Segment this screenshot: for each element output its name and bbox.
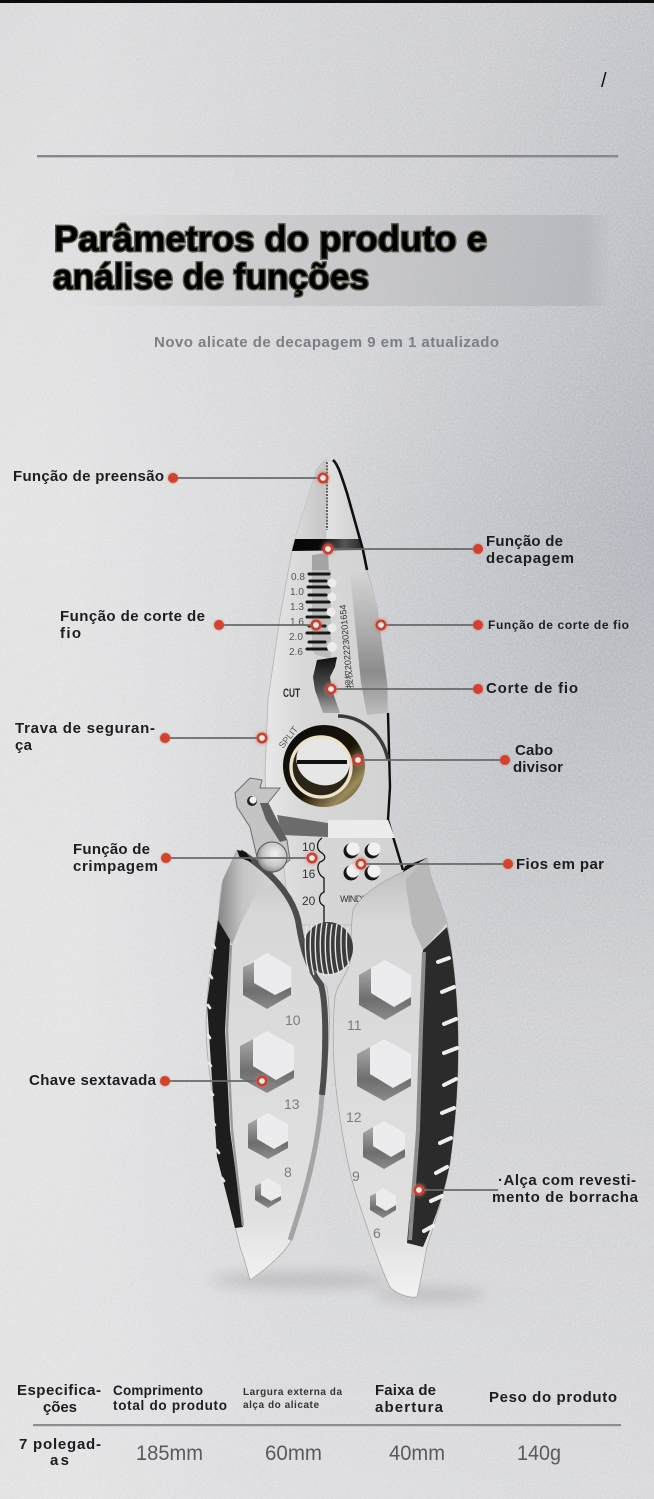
callout: safety lock: ça (15, 737, 33, 754)
spec header: handle width: alça do alicate (243, 1400, 319, 1411)
callout: crimping function (73, 841, 316, 875)
callout: paired wires (357, 856, 604, 873)
handle size numbers: 12 (346, 1109, 362, 1125)
spec value: inches: 7 polegad- (19, 1436, 101, 1453)
title: Parâmetros do produto e (54, 218, 487, 259)
spec header: model (17, 1382, 101, 1416)
handle size numbers: 6 (373, 1225, 381, 1241)
callout: paired wires: Fios em par (516, 856, 604, 873)
spec header: opening range: abertura (375, 1399, 444, 1416)
spec header: handle width: Largura externa da (243, 1387, 342, 1398)
spec header: model: Especifica- (17, 1382, 101, 1399)
spec header: total length (113, 1383, 227, 1413)
slash mark: / (601, 70, 607, 92)
title: análise de funções (53, 256, 369, 297)
handle size numbers (284, 1012, 381, 1241)
callout: hex wrench (29, 1072, 266, 1089)
spec value: width: 60mm (265, 1442, 322, 1465)
callout: wire cutting left: fio (60, 625, 81, 642)
callout: wire cutting left (60, 608, 320, 642)
inner dark edge (240, 852, 325, 1095)
callout: crimping function: crimpagem (73, 858, 158, 875)
spec header: opening range (375, 1382, 444, 1416)
wire cutter notch (313, 657, 340, 713)
lower plate detail (277, 815, 395, 925)
stripping teeth (307, 553, 337, 659)
callout: rubber coated handle: ·Alça com revesti- (498, 1172, 636, 1189)
rubber grip (207, 920, 243, 1228)
spec header: opening range: Faixa de (375, 1382, 436, 1399)
pivot shoulder (338, 716, 388, 760)
spec header: total length: total do produto (113, 1398, 227, 1413)
table divider (33, 1424, 621, 1426)
spec value: weight: 140g (517, 1442, 561, 1465)
callout: grip function: Função de preensão (13, 468, 164, 485)
specifications table (17, 1382, 621, 1469)
spec value: inches (19, 1436, 101, 1469)
handle size numbers: 9 (352, 1168, 360, 1184)
left handle (206, 850, 329, 1280)
gauge numbers: 2.6 (289, 647, 303, 658)
gauge numbers: 0.8 (291, 572, 305, 583)
hex socket inner walls (240, 962, 411, 1218)
callout: wire cutting left: Função de corte de (60, 608, 205, 625)
callout: wire cutting right (377, 618, 629, 632)
SPLIT label: SPLIT (277, 724, 300, 750)
callout: grip function (13, 468, 327, 485)
callout: safety lock: Trava de seguran- (15, 720, 155, 737)
gauge numbers: 1.6 (290, 617, 304, 628)
latch (235, 778, 290, 873)
title (50, 215, 612, 306)
callout: hex wrench: Chave sextavada (29, 1072, 157, 1089)
black right edge (333, 460, 367, 570)
rubber grip (407, 927, 458, 1247)
spec value: opening: 40mm (389, 1442, 445, 1465)
pliers illustration (206, 460, 485, 1301)
callout: splitter handle: Cabo (515, 742, 553, 759)
handle size numbers: 10 (285, 1012, 301, 1028)
gauge numbers (289, 572, 305, 658)
ground blade (350, 572, 387, 715)
spec header: total length: Comprimento (113, 1383, 203, 1398)
spec header: handle width (243, 1387, 342, 1411)
spring (303, 922, 353, 976)
callout: splitter handle: divisor (513, 759, 563, 776)
callout: stripping function: Função de (486, 533, 563, 550)
callout: stripping function: decapagem (486, 550, 574, 567)
handle size numbers: 11 (347, 1017, 362, 1033)
callout: splitter handle (354, 742, 563, 776)
subtitle: Novo alicate de decapagem 9 em 1 atualizado (154, 334, 499, 351)
lower plate detail: 16 (302, 867, 316, 881)
lower plate detail: 20 (302, 894, 316, 908)
right handle (333, 858, 458, 1297)
spec value: inches: as (50, 1452, 69, 1469)
callout: wire cut (327, 680, 578, 697)
callout: safety lock (15, 720, 266, 754)
callout: wire cut: Corte de fio (486, 680, 578, 697)
CUT label: CUT (283, 686, 300, 700)
pivot ring (283, 725, 365, 807)
gauge numbers: 1.3 (290, 602, 304, 613)
floor shadow (210, 1273, 485, 1301)
callout: stripping function (324, 533, 574, 567)
gauge numbers: 2.0 (289, 632, 303, 643)
top divider (37, 155, 618, 157)
spec header: weight: Peso do produto (489, 1389, 617, 1406)
handle size numbers: 13 (284, 1096, 300, 1112)
hex socket openings (240, 953, 411, 1218)
callout: rubber coated handle (415, 1172, 639, 1206)
patent number: 授权2022230201654 (337, 604, 355, 689)
lower plate detail: 10 (302, 840, 316, 854)
callout: wire cutting right: Função de corte de fio (488, 618, 629, 632)
gauge numbers: 1.0 (290, 587, 304, 598)
lower plate detail: WINDIN (340, 894, 370, 904)
callout: crimping function: Função de (73, 841, 150, 858)
callout: rubber coated handle: mento de borracha (492, 1189, 639, 1206)
spec value: length: 185mm (136, 1442, 203, 1465)
black cutting band (292, 539, 362, 551)
steel jaw body (265, 460, 405, 925)
spec header: model: ções (43, 1399, 77, 1416)
handle size numbers: 8 (284, 1164, 292, 1180)
